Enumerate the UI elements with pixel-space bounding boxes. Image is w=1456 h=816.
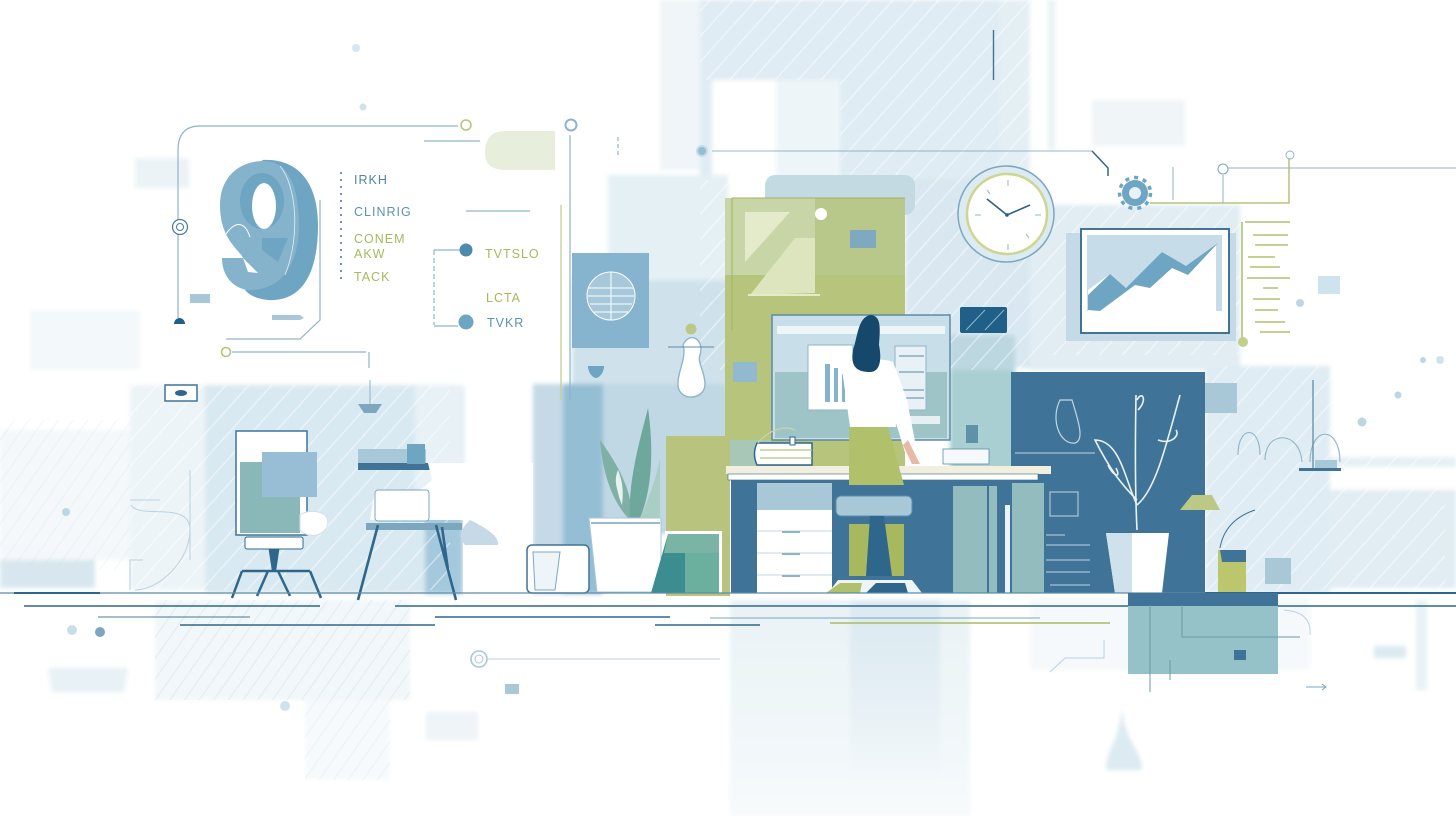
wall monitor [772,315,950,440]
small wall marker [588,366,604,378]
pendant lamp [358,380,382,413]
green note tab [485,131,555,170]
books on desk [754,428,812,465]
label list: CLINRIG [354,205,412,219]
icon: bare plant [1095,395,1180,530]
left wall sketch figure [130,470,190,590]
dotted divider [340,172,342,282]
papers on desk [943,425,989,464]
drawers [757,483,832,593]
label list: AKW [354,247,385,261]
plant with pot [589,408,722,593]
panel: left blue column and poster [572,253,714,397]
label list: CONEM [354,232,406,246]
wall pendulum [668,324,714,397]
white floor bag [527,545,589,593]
label list: TVTSLO [485,247,540,261]
panel: olive blocks [666,175,915,596]
label list: LCTA [486,291,521,305]
small dark plaque [960,307,1007,333]
small wall sign [165,385,197,401]
panel: main desk scene [726,307,1205,593]
chart panel [1066,229,1236,341]
top connector line [697,30,1108,176]
label list: IRKH [354,173,388,187]
label list [354,173,540,330]
globe poster [587,272,635,320]
text bars list [1238,222,1290,347]
desk top [726,466,1051,480]
green rule [560,205,562,400]
floating shelf [358,444,430,470]
label list: TVKR [487,316,524,330]
icon: wall clock [958,166,1054,262]
icon: gear with circuit [1120,151,1456,208]
frame lines [178,126,618,400]
floor lines [0,593,1456,625]
wall art frame [236,431,328,535]
label list: TACK [354,270,390,284]
cabinet sketch details [1015,400,1095,585]
frame nodes [172,120,576,356]
dark cabinet wall [1011,372,1205,593]
chair left [232,537,321,598]
right wall arches and shelf [1180,380,1341,592]
stool [826,496,922,593]
panel: number nine with labels [172,120,618,400]
person [841,315,920,576]
number 9 [220,160,318,300]
lower circuit lines [471,610,1326,690]
area chart [1088,243,1218,311]
panel: left office scene [165,380,722,600]
floor teal block [1128,593,1300,692]
scattered dots [62,44,1444,711]
desk right panel [953,483,1044,593]
white desk and table [358,463,533,600]
desk body left [731,480,1031,593]
white plant pot [1106,533,1169,593]
